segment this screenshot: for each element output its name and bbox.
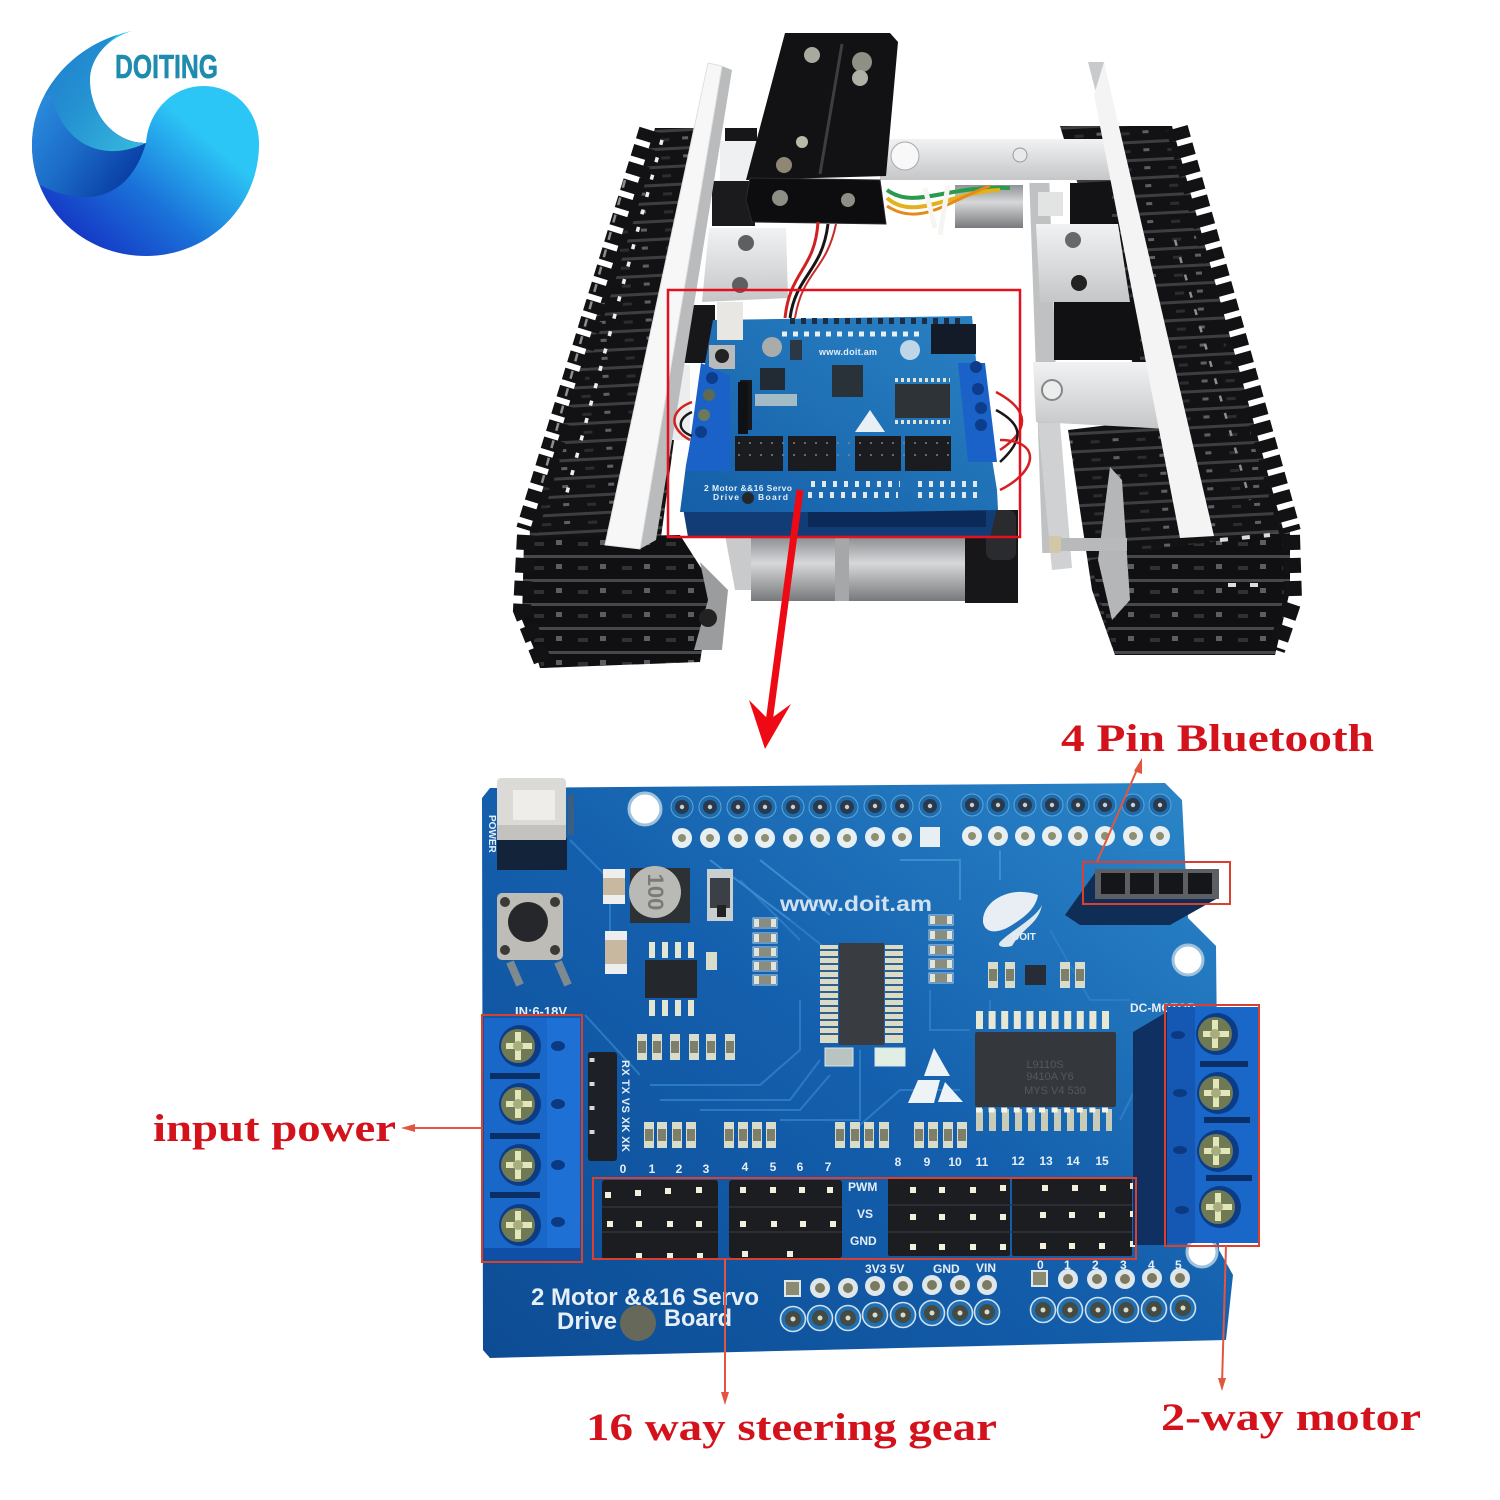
bottom pads xyxy=(780,1268,1196,1332)
resistor stack right xyxy=(929,915,953,983)
small chip group xyxy=(988,962,1085,988)
arrow: bluetooth xyxy=(1097,758,1142,862)
website text: www.doit.am xyxy=(779,893,932,916)
small blue terminal left xyxy=(686,363,730,471)
servo channel numbers: 9 xyxy=(924,1155,931,1169)
logo wordmark: DOITING xyxy=(115,48,218,85)
four resistor groups xyxy=(644,1122,967,1148)
left rail xyxy=(605,63,732,549)
big red arrow xyxy=(749,490,800,749)
serial silk labels: RX TX VS XK XK xyxy=(619,1060,631,1152)
DOIT logo on board: DOIT xyxy=(1012,932,1036,943)
tank chassis photo xyxy=(522,33,1293,668)
diode xyxy=(707,869,733,921)
motor driver chip: 9410A Y6 xyxy=(1026,1071,1074,1083)
board title silk: Drive xyxy=(557,1308,617,1335)
bottom silk labels: 4 xyxy=(1148,1258,1155,1272)
chassis cross bars xyxy=(655,128,1188,570)
servo channel numbers: 2 xyxy=(676,1162,683,1176)
small board label: Board xyxy=(758,492,788,502)
servo channel numbers: 12 xyxy=(1011,1154,1025,1168)
small blue terminal right xyxy=(958,361,997,462)
bottom silk labels: 3 xyxy=(1120,1258,1127,1272)
ESD warning triangle xyxy=(908,1048,963,1103)
servo channel numbers: 11 xyxy=(976,1155,989,1169)
power switch xyxy=(497,778,574,870)
servo channel numbers: 13 xyxy=(1039,1154,1053,1168)
reset button xyxy=(497,893,568,985)
sprockets xyxy=(694,467,1130,650)
servo channel numbers: 14 xyxy=(1066,1154,1080,1168)
driver board closeup xyxy=(482,778,1258,1358)
small power switch xyxy=(709,302,743,369)
servo channel numbers: 15 xyxy=(1095,1154,1109,1168)
bottom silk labels: VIN xyxy=(976,1261,996,1275)
bottom silk labels: 0 xyxy=(1037,1258,1044,1272)
servo channel numbers: 3 xyxy=(703,1162,710,1176)
servo channel numbers: 1 xyxy=(649,1162,656,1176)
small board label xyxy=(704,483,792,502)
resistor stack left xyxy=(753,918,777,985)
arrow: motor xyxy=(1218,1246,1226,1391)
bottom silk labels: 3V3 5V xyxy=(865,1262,904,1276)
logo mark xyxy=(32,31,259,256)
board screw hole xyxy=(620,1305,656,1341)
serial pin header xyxy=(588,1052,617,1161)
board title silk: 2 Motor &&16 Servo xyxy=(531,1284,759,1311)
servo channel numbers: 0 xyxy=(620,1162,627,1176)
right rail xyxy=(1088,62,1214,538)
side wires xyxy=(674,392,1030,490)
bottom silk labels xyxy=(865,1258,1182,1276)
small board website text: www.doit.am xyxy=(818,347,877,357)
silk: power: POWER xyxy=(486,815,497,854)
small board mount hole xyxy=(742,492,754,504)
DOIT logo on board xyxy=(983,892,1042,947)
small top pin rows xyxy=(782,321,960,334)
motor driver chip xyxy=(975,1020,1116,1120)
small components xyxy=(740,324,976,432)
capacitors xyxy=(603,869,627,974)
left bracket under board xyxy=(725,535,752,590)
4 pin bluetooth socket xyxy=(1065,869,1219,925)
label: 2-way motor: 2-way motor xyxy=(1161,1396,1421,1439)
inductor xyxy=(629,866,690,923)
label: 4 pin bluetooth: 4 Pin Bluetooth xyxy=(1061,717,1374,760)
bottom silk labels: 1 xyxy=(1064,1258,1071,1272)
battery wires xyxy=(785,222,836,318)
small board pcb xyxy=(680,316,998,512)
logo xyxy=(32,31,259,256)
motor driver chip: MYS V4 530 xyxy=(1024,1085,1086,1097)
servo headers xyxy=(602,1178,1136,1260)
small jumper xyxy=(738,382,748,434)
mounting holes xyxy=(629,793,1217,1267)
lower axle xyxy=(1049,536,1127,553)
PWM VS GND labels: GND xyxy=(850,1234,877,1248)
servo channel numbers xyxy=(620,1154,1109,1176)
battery holder xyxy=(746,33,898,224)
upper motor and wires xyxy=(887,185,1063,235)
PWM VS GND labels: PWM xyxy=(848,1180,877,1194)
small board label: Drive xyxy=(713,492,739,502)
PWM controller chip xyxy=(820,943,905,1066)
inductor: 100 xyxy=(643,874,668,910)
board pcb xyxy=(482,783,1233,1358)
bottom silk labels: 2 xyxy=(1092,1258,1099,1272)
silk label input: IN:6-18V xyxy=(515,1004,567,1019)
left track xyxy=(522,128,712,668)
bottom silk labels: GND xyxy=(933,1262,960,1276)
servo channel numbers: 5 xyxy=(770,1160,777,1174)
board title silk: Board xyxy=(664,1305,732,1332)
servo channel numbers: 7 xyxy=(825,1160,832,1174)
callout boxes xyxy=(482,862,1259,1262)
label: input power: input power xyxy=(153,1107,396,1150)
small servo headers xyxy=(735,436,951,471)
lower motor xyxy=(751,510,1018,603)
PWM VS GND labels: VS xyxy=(857,1207,873,1221)
top pin row xyxy=(671,794,1171,848)
bottom silk labels: 5 xyxy=(1175,1258,1182,1272)
servo channel numbers: 8 xyxy=(895,1155,902,1169)
left terminal block xyxy=(484,1018,580,1258)
small driver board xyxy=(680,302,998,537)
pcb traces xyxy=(570,840,1180,1125)
silk labels on upper right: DC-MOTOR xyxy=(1130,1001,1196,1015)
PWM VS GND labels xyxy=(848,1180,877,1248)
resistor row xyxy=(637,1034,735,1060)
right track xyxy=(1060,126,1293,655)
small board label: 2 Motor &&16 Servo xyxy=(704,483,792,493)
arrow: steering gear xyxy=(721,1259,729,1405)
SOIC regulator xyxy=(645,942,717,1016)
right terminal block xyxy=(1133,1007,1258,1245)
servo channel numbers: 10 xyxy=(948,1155,962,1169)
small board lower shield xyxy=(683,508,997,537)
motor driver chip: L9110S xyxy=(1026,1059,1064,1071)
servo channel numbers: 4 xyxy=(742,1160,749,1174)
board title silk xyxy=(531,1284,759,1335)
arrow: input power xyxy=(401,1124,482,1132)
highlight box on chassis xyxy=(668,290,1020,537)
servo channel numbers: 6 xyxy=(797,1160,804,1174)
label: 16 way steering gear: 16 way steering gear xyxy=(586,1406,997,1449)
small bottom pads xyxy=(808,484,984,495)
